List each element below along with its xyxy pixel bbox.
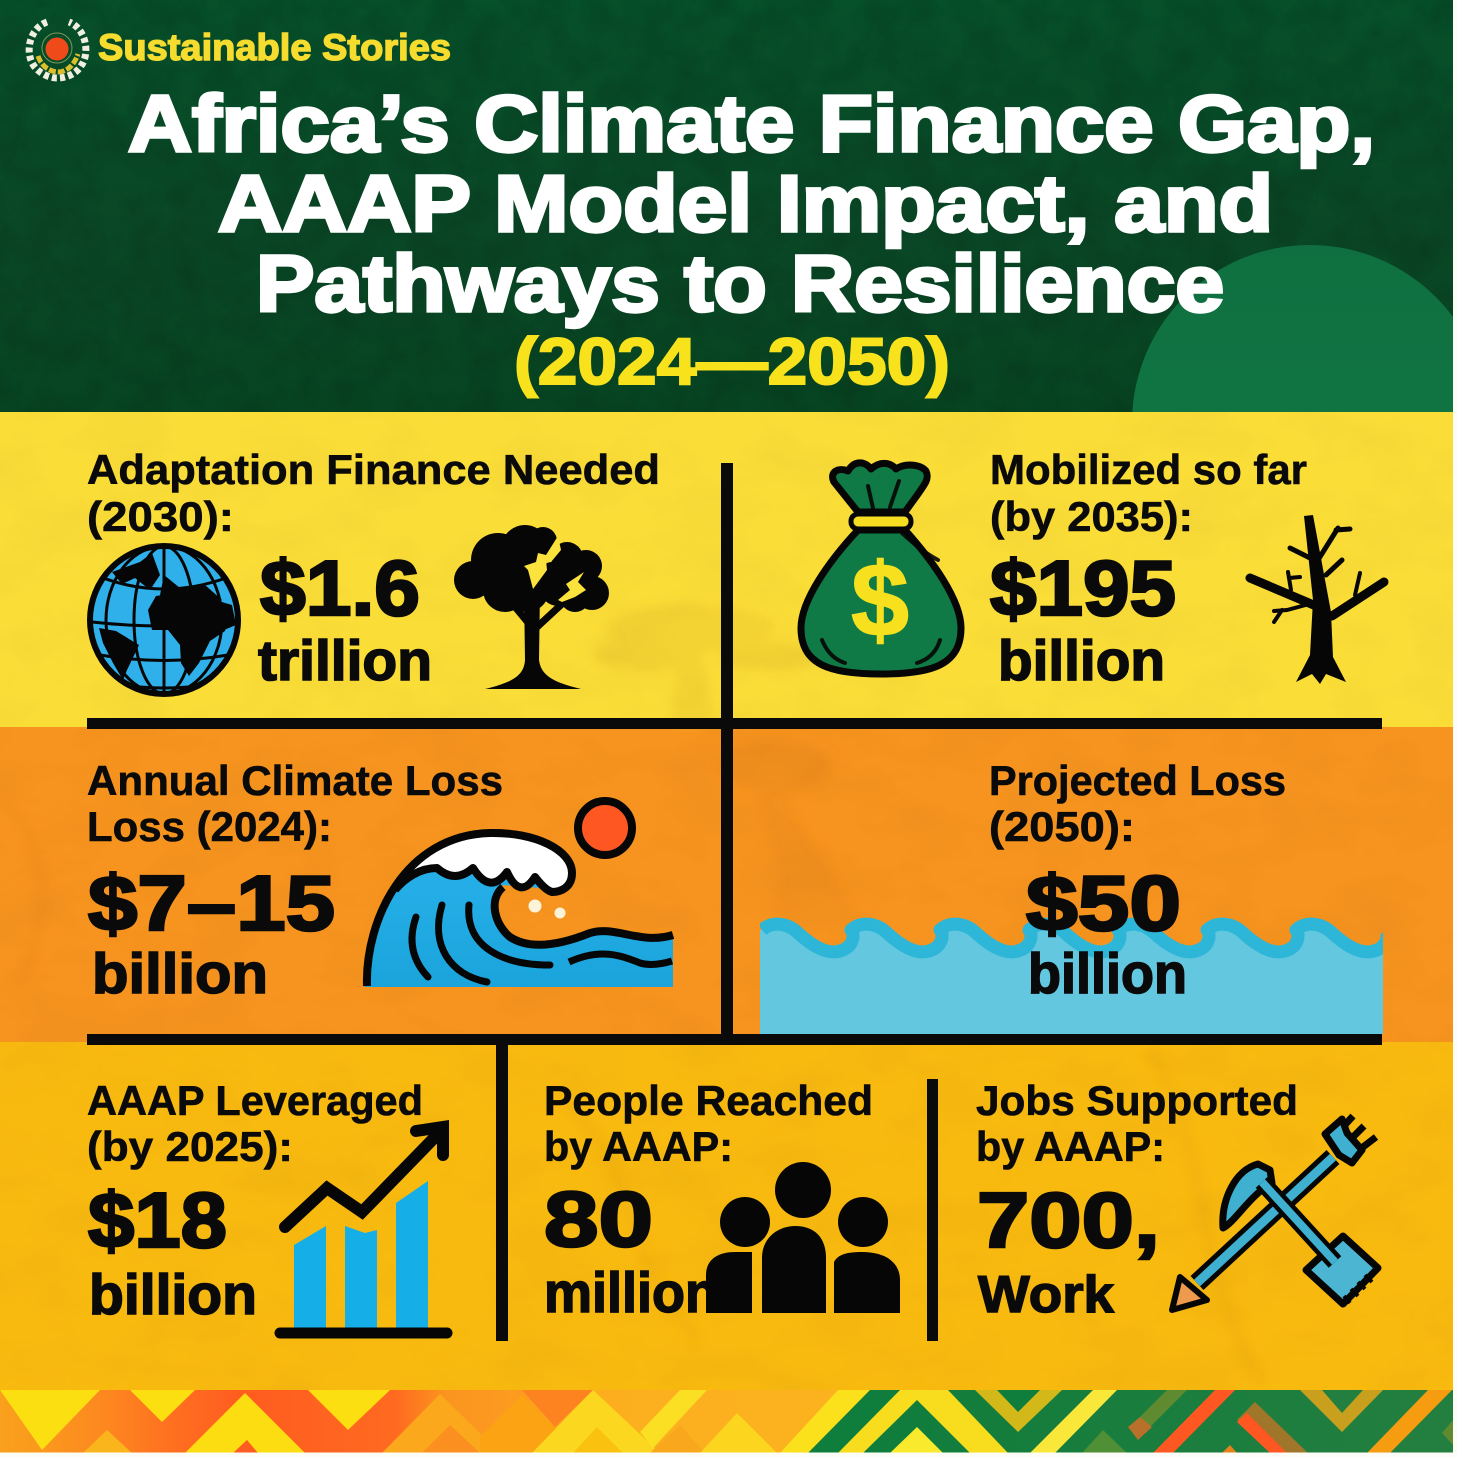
value: $195	[990, 544, 1176, 632]
unit: trillion	[258, 629, 432, 693]
title: (2024—2050)	[514, 324, 950, 398]
dividers	[87, 463, 1382, 1341]
panel: projected loss	[760, 757, 1387, 1034]
unit: billion	[1028, 942, 1187, 1006]
icon: money bag	[801, 463, 961, 674]
icon: growth chart	[280, 1127, 447, 1333]
unit: billion	[92, 942, 268, 1006]
icon: bare tree	[1250, 515, 1384, 684]
heading: Adaptation Finance Needed	[87, 446, 660, 493]
subheading: (2030):	[87, 493, 234, 540]
panel: jobs supported	[976, 1077, 1378, 1324]
subheading: by AAAP:	[544, 1123, 733, 1170]
heading: AAAP Leveraged	[87, 1077, 423, 1124]
value: $7–15	[88, 859, 335, 947]
header mottling	[0, 0, 1453, 412]
icon: flood water	[760, 924, 1387, 1034]
value: 700,	[977, 1176, 1160, 1264]
header background	[0, 0, 1453, 412]
subheading: Loss (2024):	[87, 803, 332, 850]
value: $18	[88, 1176, 227, 1264]
icon: group of people	[706, 1162, 900, 1313]
panel: AAAP leveraged	[87, 1077, 447, 1333]
value: $1.6	[260, 544, 420, 632]
band: amber	[0, 1042, 1453, 1390]
title: Pathways to Resilience	[256, 239, 1224, 328]
faded acacia tree backdrop	[0, 604, 1260, 1380]
band: orange	[0, 727, 1453, 1042]
decorative patterned footer	[0, 1390, 1453, 1453]
value: 80	[544, 1175, 653, 1263]
subheading: (2050):	[989, 803, 1135, 850]
heading: Annual Climate Loss	[87, 757, 503, 804]
unit: Work	[978, 1266, 1114, 1324]
title	[128, 79, 1375, 398]
panel: annual climate loss	[87, 757, 673, 1006]
band: yellow	[0, 412, 1453, 727]
icon: globe	[90, 546, 238, 694]
icon: tsunami wave with sun	[365, 801, 673, 987]
icon: money bag: $	[851, 543, 909, 659]
value: $50	[1026, 859, 1181, 947]
unit: million	[544, 1261, 718, 1325]
panel: people reached	[544, 1077, 900, 1325]
title: Africa’s Climate Finance Gap,	[128, 79, 1375, 168]
paper texture	[0, 412, 1453, 1390]
unit: billion	[89, 1263, 257, 1327]
header hill	[1132, 245, 1453, 412]
heading: People Reached	[544, 1077, 873, 1124]
title: AAAP Model Impact, and	[218, 159, 1273, 248]
icon: wreath emblem	[29, 22, 86, 78]
heading: Jobs Supported	[976, 1077, 1298, 1124]
brand logo and name	[29, 22, 451, 78]
heading: Projected Loss	[989, 757, 1286, 804]
subheading: (by 2025):	[87, 1123, 293, 1170]
panel: adaptation finance needed	[87, 446, 660, 694]
icon: tree struck by lightning	[454, 525, 609, 689]
panel: mobilized so far	[801, 446, 1384, 693]
brand name: Sustainable Stories	[98, 27, 451, 68]
icon: crossed hammer and rake	[1172, 1116, 1378, 1310]
unit: billion	[998, 629, 1165, 693]
heading: Mobilized so far	[990, 446, 1307, 493]
subheading: (by 2035):	[990, 493, 1193, 540]
subheading: by AAAP:	[976, 1123, 1165, 1170]
